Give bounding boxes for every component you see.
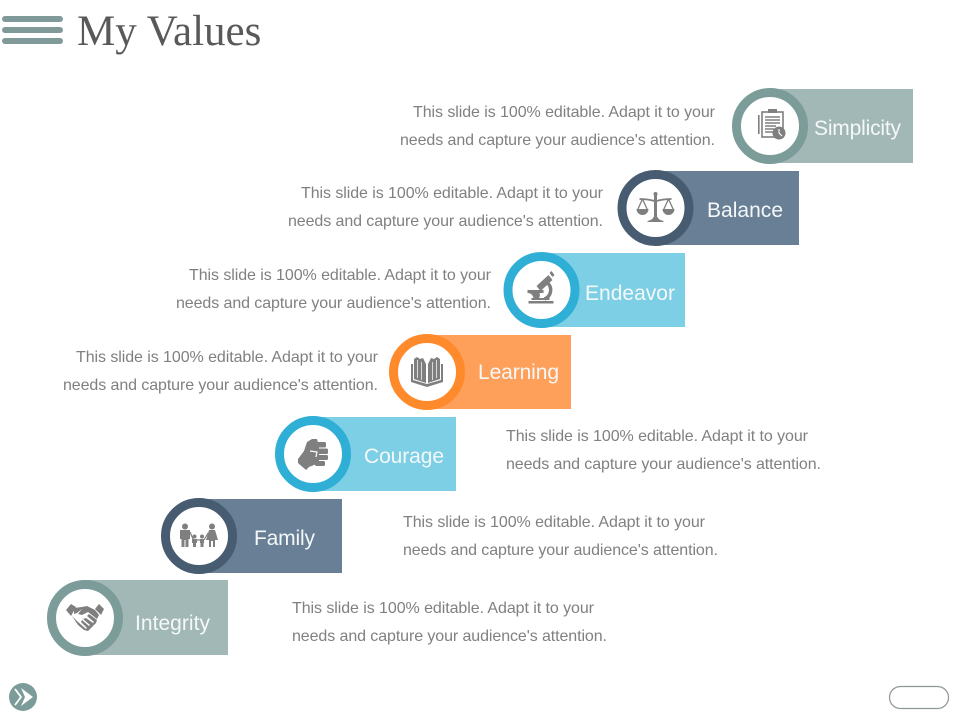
icon: handshake <box>66 604 104 631</box>
description: Learning <box>63 349 379 394</box>
label: Learning: Learning <box>478 361 559 384</box>
step: Family <box>166 499 342 573</box>
ring: Endeavor <box>508 256 575 324</box>
label bar: Courage <box>313 417 456 491</box>
icon: open book <box>411 357 443 387</box>
title: My Values <box>77 8 261 55</box>
label: Courage: Courage <box>364 445 444 468</box>
description: Balance: needs and capture your audience's attention. <box>288 213 603 230</box>
step: Integrity <box>52 580 228 655</box>
ring: Courage <box>280 420 346 488</box>
description: Simplicity <box>400 104 716 149</box>
ring: Simplicity <box>736 92 804 160</box>
description: Integrity <box>292 600 607 645</box>
description: Learning: This slide is 100% editable. Adapt it to your <box>76 349 379 366</box>
label bar: Learning <box>428 335 571 409</box>
icon: family <box>180 524 218 547</box>
label bar: Simplicity <box>770 89 913 163</box>
step: Learning <box>394 335 571 409</box>
step: Courage <box>280 417 456 491</box>
description: Courage <box>506 428 821 473</box>
description: Family: needs and capture your audience's attention. <box>403 542 718 559</box>
step: Endeavor <box>508 253 685 327</box>
label bar: Family <box>199 499 342 573</box>
label: Balance: Balance <box>707 199 783 222</box>
icon: fist <box>298 439 328 470</box>
description: Learning: needs and capture your audience's attention. <box>63 377 378 394</box>
label: Endeavor: Endeavor <box>585 282 675 305</box>
label: Simplicity: Simplicity <box>814 117 902 140</box>
label bar: Integrity <box>85 580 228 655</box>
description: Courage: This slide is 100% editable. Adapt it to your <box>506 428 809 445</box>
description: Family: This slide is 100% editable. Adapt it to your <box>403 514 706 531</box>
icon: scales <box>636 192 674 222</box>
label bar: Endeavor <box>542 253 685 327</box>
step: Simplicity <box>736 89 913 163</box>
description: Integrity: needs and capture your audience's attention. <box>292 628 607 645</box>
icon: title menu bars <box>2 16 63 44</box>
ring: Balance <box>622 174 689 242</box>
ring: Integrity <box>52 584 118 652</box>
ring: Family <box>166 502 232 570</box>
icon: clipboard with clock <box>758 109 786 140</box>
description: Endeavor <box>176 267 492 312</box>
icon: microscope <box>528 271 554 304</box>
step: Balance <box>622 171 799 245</box>
description: Simplicity: needs and capture your audience's attention. <box>400 132 715 149</box>
label: Family: Family <box>254 527 316 550</box>
ring: Learning <box>394 338 460 406</box>
description: Balance <box>288 185 604 230</box>
description: Simplicity: This slide is 100% editable. Adapt it to your <box>413 104 716 121</box>
description: Endeavor: This slide is 100% editable. Adapt it to your <box>189 267 492 284</box>
label: Integrity: Integrity <box>135 612 210 635</box>
description: Endeavor: needs and capture your audience's attention. <box>176 295 491 312</box>
label bar: Balance <box>656 171 799 245</box>
icon: next arrow button <box>9 683 37 711</box>
pill button <box>890 686 948 708</box>
description: Courage: needs and capture your audience's attention. <box>506 456 821 473</box>
description: Integrity: This slide is 100% editable. Adapt it to your <box>292 600 595 617</box>
description: Balance: This slide is 100% editable. Adapt it to your <box>301 185 604 202</box>
description: Family <box>403 514 718 559</box>
